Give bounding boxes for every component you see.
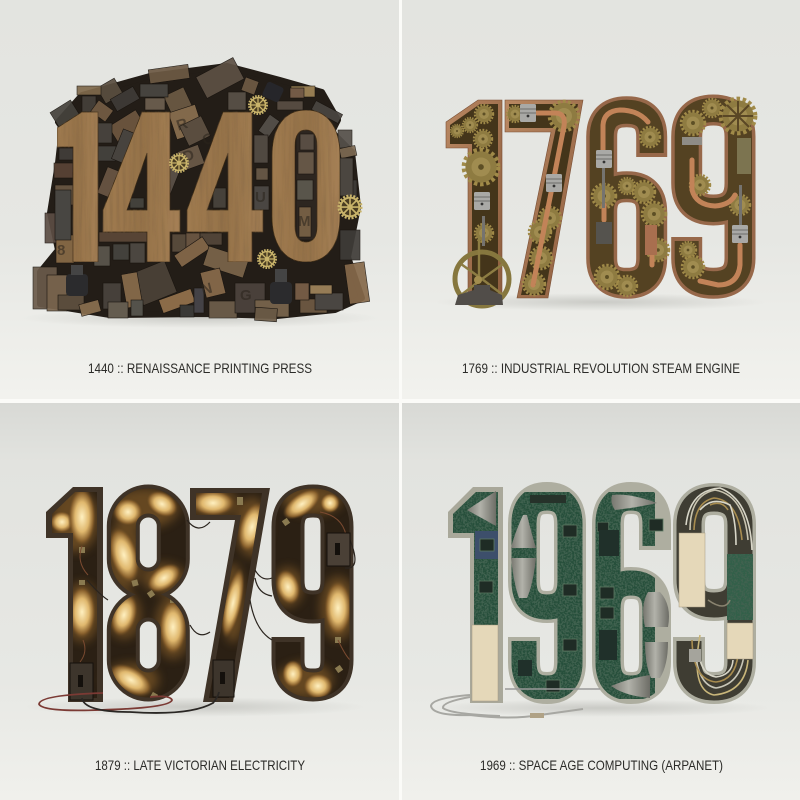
caption: 1769: 1769 :: INDUSTRIAL REVOLUTION STEAM ENGINE <box>462 360 740 376</box>
type letters on blocks: D <box>181 146 197 166</box>
caption: 1879: 1879 :: LATE VICTORIAN ELECTRICITY <box>95 757 306 773</box>
digit interiors <box>52 492 262 698</box>
bulb glow inside digits <box>50 482 356 703</box>
brass gears in pile <box>170 96 361 268</box>
chips <box>479 495 745 692</box>
cream breadboards <box>472 533 753 701</box>
copper pipes <box>533 110 740 285</box>
type letters on blocks: N <box>199 280 214 299</box>
digit frames <box>448 487 503 703</box>
digit 0 <box>272 110 340 262</box>
filament bulbs <box>50 482 352 703</box>
inner wires <box>80 512 350 662</box>
floor cables <box>39 692 219 713</box>
digits: 1440 <box>57 110 340 262</box>
gears <box>451 99 755 296</box>
vacuum tube cones <box>467 491 669 698</box>
caption: 1969: 1969 :: SPACE AGE COMPUTING (ARPANET) <box>480 757 723 773</box>
panel: 1879 electricity <box>0 403 399 800</box>
shadow under type pile <box>20 308 380 328</box>
type letters on blocks: 8 <box>57 242 65 259</box>
type letters on blocks: M <box>298 213 310 230</box>
type pile <box>33 58 370 322</box>
type letters on blocks: C <box>200 130 217 150</box>
panel: 1440 printing press <box>0 0 399 399</box>
type letters on blocks <box>57 115 310 304</box>
switch boxes <box>70 533 350 700</box>
digit frames <box>446 100 583 298</box>
digit 4 second <box>187 112 263 262</box>
type letters on blocks: G <box>240 287 252 304</box>
grey network cable <box>431 689 600 718</box>
flywheel and base <box>455 235 509 306</box>
wires between digits <box>87 520 355 640</box>
digit interiors <box>450 104 578 295</box>
shadow under digits <box>430 699 770 717</box>
bulb screw bases <box>79 497 343 700</box>
panel: 1769 steam engine <box>402 0 800 399</box>
shadow under digits <box>25 697 365 717</box>
last nine circuit board <box>727 554 753 620</box>
shadow under digits <box>435 293 765 311</box>
pistons <box>474 104 751 255</box>
wires in last nine <box>686 488 752 695</box>
digit frames <box>46 487 270 702</box>
panel: 1969 computing <box>402 403 800 800</box>
type letters on blocks: R <box>174 115 190 135</box>
digits: 1969 <box>448 487 753 703</box>
digit 1 <box>57 112 98 262</box>
type letters on blocks: U <box>255 189 266 206</box>
blue board <box>475 531 498 559</box>
digit 4 <box>103 112 180 262</box>
digits: 1769 <box>446 99 755 306</box>
digit interiors <box>453 492 655 699</box>
ink bottles <box>66 81 292 304</box>
caption: 1440: 1440 :: RENAISSANCE PRINTING PRESS <box>88 360 312 376</box>
digits: 1879 <box>46 482 356 703</box>
